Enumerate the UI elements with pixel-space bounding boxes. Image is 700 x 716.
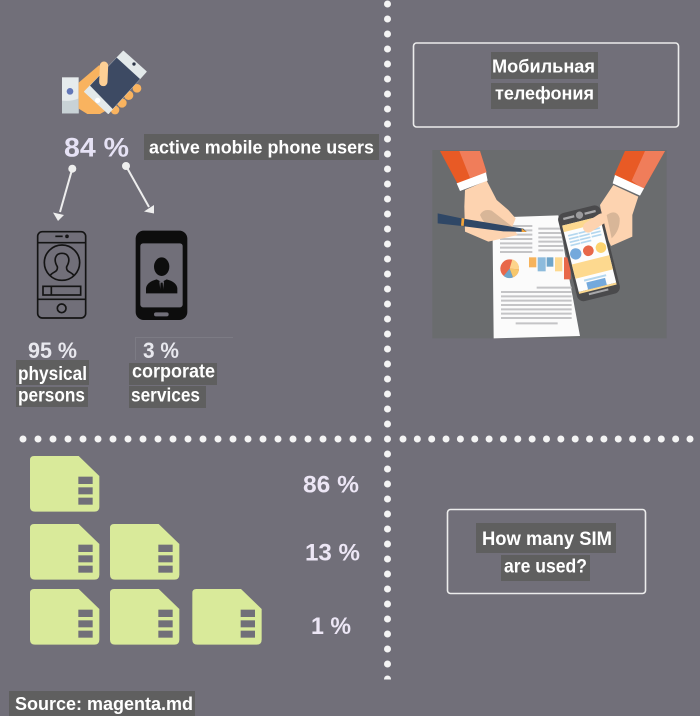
illustration: hands with document and smartphone: [432, 150, 667, 338]
label: active mobile phone users: active mobile phone users: [149, 136, 374, 157]
icon row: two SIM cards: [30, 524, 179, 580]
stat: 1 %: 1 %: [311, 613, 351, 640]
title box: How many SIM are used?: How many SIM: [482, 529, 612, 550]
stat: 13 %: 13 %: [305, 540, 360, 567]
title box: Мобильная телефония: телефония: [495, 83, 594, 103]
stat: 3 %: [136, 338, 233, 363]
smartphone: [557, 204, 621, 303]
title box: Мобильная телефония: [414, 43, 678, 127]
source line: Source: magenta.md: [15, 693, 193, 714]
title box: How many SIM are used?: are used?: [504, 557, 587, 578]
label: physical persons: physical: [18, 364, 87, 385]
title box: How many SIM are used?: [448, 510, 646, 594]
label: physical persons: persons: [18, 386, 85, 406]
label: physical persons: [16, 360, 89, 407]
label: corporate services: corporate: [132, 362, 215, 383]
title box: Мобильная телефония: Мобильная: [492, 57, 595, 77]
document: [493, 215, 580, 338]
icon row: three SIM cards: [30, 589, 262, 645]
label: corporate services: [129, 362, 217, 408]
icon: solid phone with businessman: [136, 231, 187, 320]
stat: 84 %: 84 %: [64, 132, 129, 162]
icon: hand holding phone: [62, 51, 146, 114]
right hand back: [600, 151, 665, 246]
icon row: one SIM card: [30, 456, 99, 512]
arrow: to corporate services: [122, 162, 154, 214]
stat: 3 %: 3 %: [143, 338, 179, 363]
label: corporate services: services: [131, 386, 200, 406]
left hand with pen: [438, 151, 527, 242]
thumb: [588, 219, 602, 227]
icon: outline phone with user: [38, 232, 86, 318]
arrow: to physical persons: [53, 165, 76, 221]
stat: 95 %: 95 %: [28, 338, 77, 363]
stat: 86 %: 86 %: [303, 471, 359, 498]
